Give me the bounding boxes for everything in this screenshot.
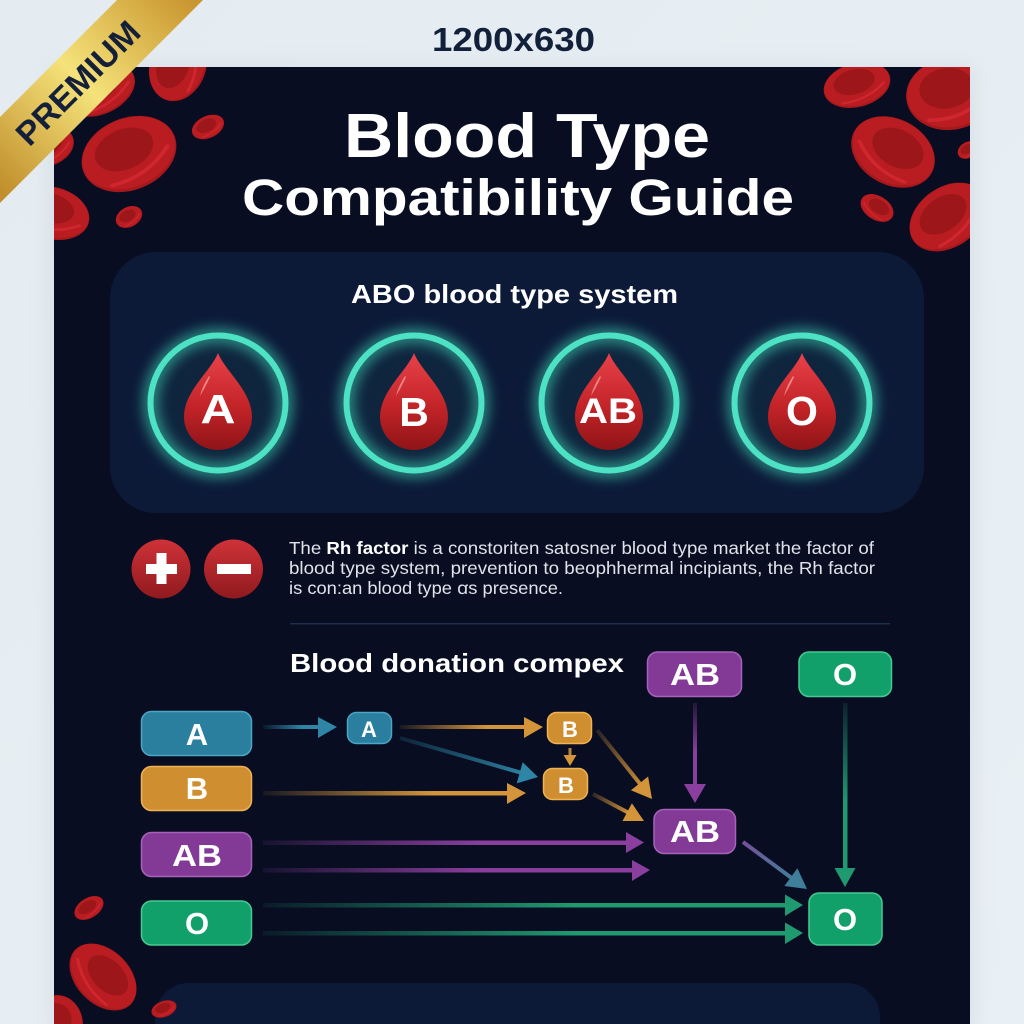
node: top AB: [648, 652, 742, 696]
type B drop in ring: [346, 336, 482, 470]
arrow: lower B to AB: [593, 794, 644, 821]
donor box B: [142, 766, 252, 810]
Rh factor text block: is con:an blood type ꭤs presence.: [289, 578, 563, 598]
arrow: B row: [263, 783, 526, 804]
premium ribbon: [0, 0, 203, 203]
arrow: O row two: [263, 922, 803, 944]
node: lower B: B: [558, 773, 574, 798]
donor box AB: [142, 832, 252, 876]
node: top O: [799, 652, 892, 696]
arrow: AB row two: [263, 860, 650, 881]
type B drop in ring: B: [399, 389, 429, 435]
donor box B: B: [186, 771, 208, 806]
node: AB: [654, 810, 736, 854]
arrow: top AB to AB: [684, 703, 706, 803]
donor box A: [142, 712, 252, 756]
donor box A: A: [186, 717, 208, 752]
arrow: A to small A: [263, 717, 337, 738]
arrow: small A to lower B: [400, 738, 538, 783]
node: bottom O: [809, 893, 882, 945]
heading: blood donation: Blood donation compex: [290, 648, 625, 678]
node: AB: AB: [670, 814, 720, 849]
arrow: top O to O: [834, 703, 856, 887]
premium ribbon: PREMIUM: [8, 13, 148, 153]
title: Compatibility Guide: [242, 169, 794, 226]
blood cell cluster: top left: [54, 67, 224, 240]
type O drop in ring: [734, 336, 870, 470]
node: upper B: [548, 712, 592, 744]
node: lower B: [544, 768, 588, 800]
flow chart: donation compatibility: [142, 652, 892, 945]
type A drop in ring: [150, 336, 286, 470]
lower panel (cropped): [155, 983, 880, 1024]
Rh factor text block: [289, 538, 875, 598]
blood cell cluster: top right: [824, 67, 970, 252]
node: upper B: B: [562, 717, 578, 742]
panel: ABO blood type system: [110, 252, 924, 513]
title: Blood Type: [344, 102, 710, 171]
donor box O: [142, 901, 252, 945]
icon: Rh negative: [204, 540, 263, 598]
heading: ABO system: ABO blood type system: [351, 279, 678, 309]
arrow: AB row one: [263, 832, 644, 853]
donor box O: O: [185, 906, 209, 941]
icon: Rh positive: [132, 540, 190, 598]
type O drop in ring: O: [786, 388, 818, 434]
arrow: upper B to AB: [597, 730, 652, 799]
canvas size label: 1200x630: [432, 21, 595, 58]
type AB drop in ring: [542, 336, 676, 470]
title: [242, 102, 794, 226]
donor box AB: AB: [172, 838, 222, 873]
arrow: upper B to lower B: [564, 748, 576, 766]
arrow: AB to O: [743, 842, 807, 889]
type AB drop in ring: AB: [579, 392, 637, 431]
node: top AB: AB: [670, 657, 720, 692]
type A drop in ring: A: [200, 386, 236, 432]
Rh factor text block: The Rh factor is a constoriten satosner blood type market the factor of: [289, 538, 874, 558]
arrow: O row one: [263, 894, 803, 916]
blood cell cluster: bottom left: [54, 896, 176, 1024]
Rh factor text block: blood type system, prevention to beophhermal incipiants, the Rh factor: [289, 558, 875, 578]
node: bottom O: O: [833, 902, 857, 937]
node: top O: O: [833, 657, 857, 692]
node: small A: [348, 712, 392, 744]
node: small A: A: [361, 717, 377, 742]
arrow: small A to upper B: [400, 717, 543, 738]
